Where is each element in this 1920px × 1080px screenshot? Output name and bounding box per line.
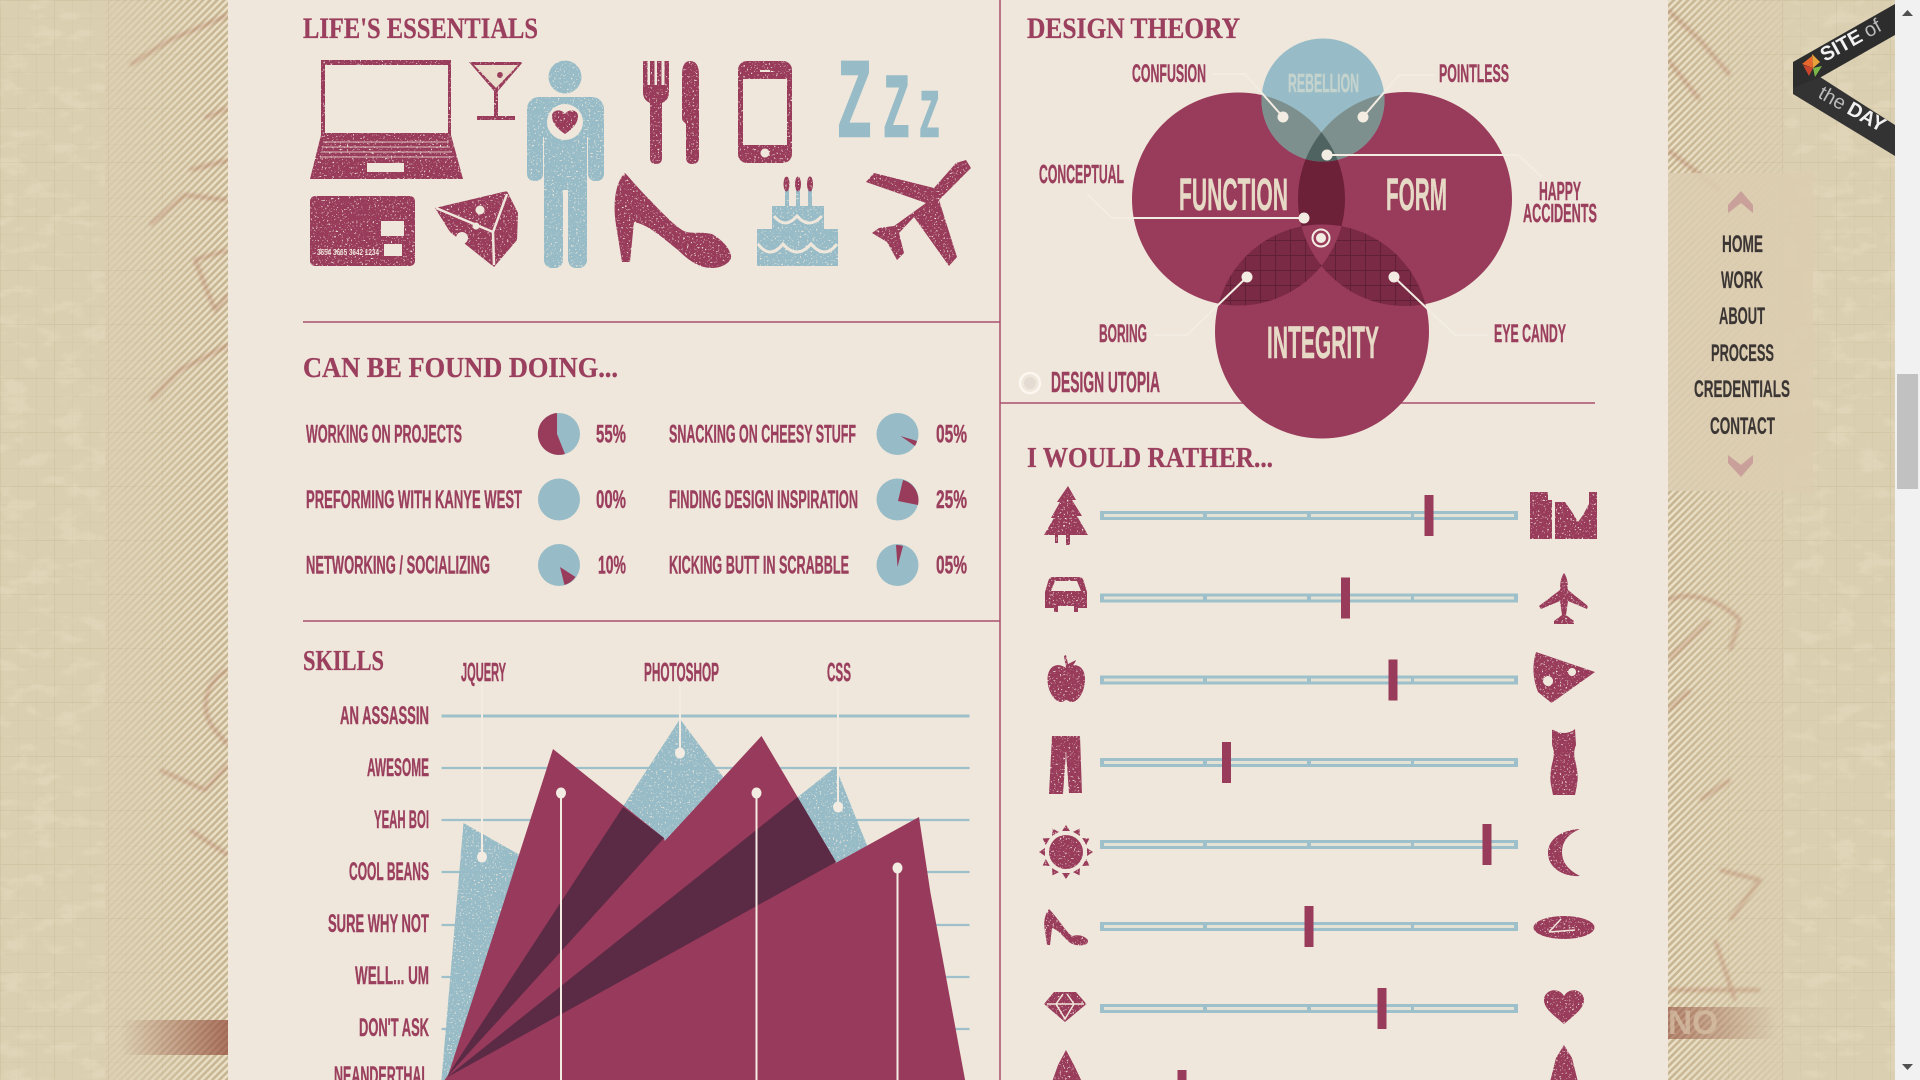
venn circle labels	[1179, 68, 1447, 368]
row: finding design inspiration 25%: 25%	[936, 486, 967, 514]
page background: NO	[1668, 1004, 1718, 1042]
design utopia marker	[1312, 230, 1330, 246]
icon: airplane	[866, 160, 971, 266]
nav links: ABOUT	[1719, 303, 1765, 330]
panel: design theory: FORM	[1386, 169, 1447, 220]
icon: sleeping zzz: Z	[838, 38, 871, 159]
skill column labels	[461, 657, 851, 687]
venn circle labels: INTEGRITY	[1267, 317, 1379, 368]
skill scale labels: WELL... UM	[355, 962, 429, 990]
row: finding design inspiration 25%: FINDING DESIGN INSPIRATION	[669, 486, 858, 514]
panel: skills	[303, 646, 970, 1080]
icon: cropped tree right	[1550, 1045, 1578, 1080]
nav links: HOME	[1722, 231, 1763, 258]
icon: scroll up arrow	[1902, 10, 1913, 16]
icon: trees	[1044, 486, 1088, 545]
icon: high heel	[615, 173, 731, 268]
skill scale labels	[328, 702, 429, 1080]
slider tracks	[1100, 511, 1518, 1013]
row: kicking butt in scrabble 05%: KICKING BUTT IN SCRABBLE	[669, 552, 849, 580]
row: snacking on cheesy stuff 05%: 05%	[936, 420, 967, 448]
icon: award logo	[1802, 54, 1822, 77]
icon: sleeping zzz: Z	[884, 59, 909, 155]
panel: skills: CSS	[827, 657, 851, 687]
icon: moon	[1548, 829, 1580, 876]
icon: nav up chevron	[1728, 191, 1753, 213]
row: snacking on cheesy stuff 05%	[669, 413, 967, 455]
venn callout labels: BORING	[1099, 320, 1147, 348]
navigation panel	[1668, 173, 1813, 491]
icon: sun	[1039, 825, 1093, 879]
row: kicking butt in scrabble 05%	[669, 544, 967, 586]
skill column labels: PHOTOSHOP	[644, 657, 719, 687]
venn diagram	[1132, 38, 1512, 438]
icon: heart	[1544, 990, 1584, 1024]
row: networking socializing 10%: NETWORKING / SOCIALIZING	[306, 552, 490, 580]
venn callout labels: EYE CANDY	[1494, 320, 1566, 348]
row: preforming with kanye west 00%: PREFORMING WITH KANYE WEST	[306, 486, 522, 514]
icon: person with heart	[527, 60, 604, 268]
icon: dress	[1550, 729, 1578, 795]
left and right choice icons	[1039, 486, 1597, 1080]
row: preforming with kanye west 00%	[306, 478, 626, 520]
panel: i would rather	[1027, 442, 1597, 1080]
row: preforming with kanye west 00%: 00%	[596, 486, 626, 514]
icon: upright plane	[1539, 573, 1588, 624]
icon: cheese	[435, 191, 518, 267]
heading: i would rather: I WOULD RATHER...	[1027, 442, 1273, 474]
icon: laptop	[310, 60, 463, 179]
site of the day ribbon	[1793, 4, 1895, 156]
row: snacking on cheesy stuff 05%: SNACKING ON CHEESY STUFF	[669, 420, 856, 448]
heading: design theory: DESIGN THEORY	[1027, 12, 1240, 45]
icon: small high heel	[1044, 909, 1088, 945]
row: working on projects 55%: WORKING ON PROJECTS	[306, 420, 462, 448]
venn callout labels: CONCEPTUAL	[1039, 159, 1124, 189]
icon: pants	[1049, 736, 1082, 794]
icon: city skyline	[1530, 492, 1597, 539]
row: networking socializing 10%: 10%	[598, 552, 626, 580]
panel: skills: COOL BEANS	[349, 858, 429, 886]
panel: can be found doing	[303, 352, 967, 586]
icon: birthday cake	[757, 176, 838, 266]
row: networking socializing 10%	[306, 544, 626, 586]
nav links: WORK	[1721, 267, 1763, 294]
skill scale labels: AN ASSASSIN	[340, 702, 429, 730]
venn leader lines	[1087, 74, 1542, 335]
main paper panel	[228, 0, 1668, 1080]
venn callout labels	[1039, 60, 1597, 348]
scrollbar	[1895, 0, 1920, 1080]
venn callout labels: HAPPY	[1539, 176, 1581, 206]
icon: smartphone	[738, 61, 792, 163]
panel: design theory	[1020, 0, 1600, 450]
row: kicking butt in scrabble 05%: 05%	[936, 552, 967, 580]
icon: sleeping zzz	[838, 38, 939, 159]
panel: design theory: DESIGN UTOPIA	[1051, 367, 1160, 399]
nav links: CONTACT	[1710, 413, 1775, 440]
skill column labels: JQUERY	[461, 657, 506, 687]
icon: cropped tree left	[1052, 1050, 1082, 1080]
heading: life's essentials: LIFE'S ESSENTIALS	[303, 12, 538, 45]
icon: car	[1045, 577, 1087, 612]
slider handles	[1178, 495, 1492, 1080]
icons group	[310, 60, 971, 268]
icon: flip flop	[1534, 916, 1594, 939]
heading: can be found doing: CAN BE FOUND DOING...	[303, 352, 618, 384]
panel: skills: AWESOME	[367, 754, 429, 782]
nav links: PROCESS	[1711, 340, 1774, 367]
icon: fork and knife	[643, 61, 699, 164]
venn callout labels: POINTLESS	[1439, 60, 1509, 88]
icon: scroll down arrow	[1902, 1064, 1913, 1070]
row: finding design inspiration 25%	[669, 478, 967, 520]
row: working on projects 55%	[306, 413, 626, 455]
icon: credit card	[310, 196, 415, 266]
column dividers	[303, 0, 1595, 1080]
icon: card number: 3654 3665 3642 1234	[317, 248, 379, 257]
venn circle labels: FUNCTION	[1179, 169, 1288, 220]
ribbon text: site of: SITEof	[1817, 15, 1886, 66]
panel: life's essentials: Z	[920, 78, 939, 150]
icon: pizza slice	[1533, 652, 1595, 703]
ribbon text: the day: theDAY	[1815, 82, 1890, 137]
chart gridlines	[442, 716, 970, 1029]
venn circle labels: REBELLION	[1288, 68, 1359, 98]
venn callout labels: CONFUSION	[1132, 60, 1206, 88]
icon: martini	[469, 62, 523, 120]
skill pointers	[477, 685, 902, 1080]
mountain chart	[441, 719, 966, 1080]
panel: skills: YEAH BOI	[374, 806, 429, 834]
skill scale labels: SURE WHY NOT	[328, 910, 429, 938]
icon: nav down chevron	[1728, 455, 1753, 477]
heading: skills: SKILLS	[303, 646, 384, 677]
legend: design utopia	[1020, 367, 1160, 399]
skill scale labels: DON'T ASK	[359, 1014, 429, 1042]
nav links	[1694, 231, 1790, 440]
row: working on projects 55%: 55%	[596, 420, 626, 448]
icon: diamond	[1044, 992, 1086, 1022]
panel: design theory: ACCIDENTS	[1523, 198, 1597, 228]
nav links: CREDENTIALS	[1694, 376, 1790, 403]
icon: apple	[1048, 655, 1085, 702]
panel: life's essentials	[303, 12, 971, 268]
